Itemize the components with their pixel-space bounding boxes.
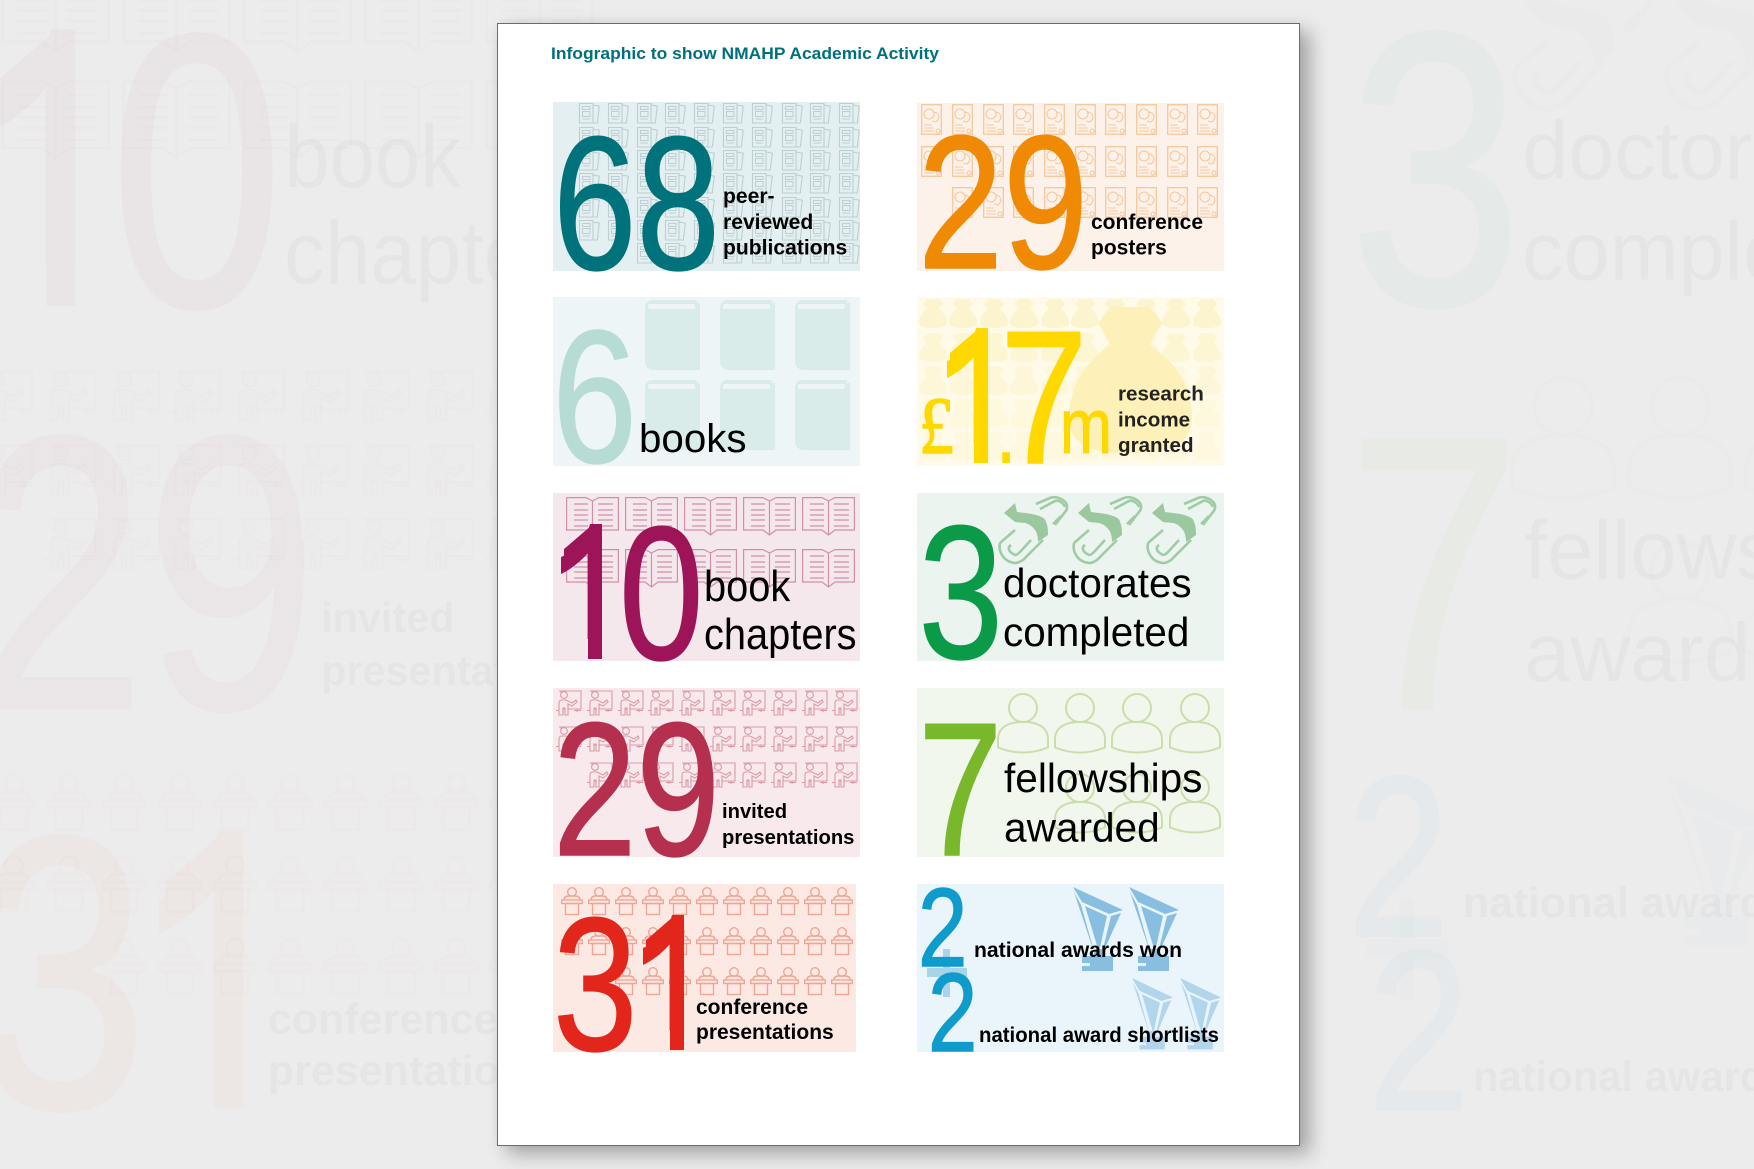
background: enlarged faded infographic: 7	[1348, 355, 1521, 791]
label: doctorates completed: doctorates	[1003, 560, 1192, 606]
number: £1.7m: 7	[1000, 291, 1088, 503]
panel: conference posters	[917, 96, 1224, 309]
label: books: books	[639, 416, 747, 461]
label: peer-reviewed publications: peer-	[723, 185, 775, 208]
background: enlarged faded infographic: presentations	[268, 1047, 550, 1095]
icons: posters grid	[922, 105, 1217, 217]
panel: conference presentations	[553, 884, 856, 1053]
panel: invited presentations	[553, 684, 860, 896]
panel: peer-reviewed publications	[553, 98, 860, 310]
label: research income granted: income	[1118, 408, 1190, 432]
icons: books	[645, 300, 850, 450]
number: 31	[558, 915, 684, 1053]
label: research income granted: granted	[1118, 434, 1194, 457]
panel: national awards	[917, 867, 1224, 1075]
icons: publications grid	[580, 104, 859, 263]
number: 10	[561, 524, 698, 662]
label: conference presentations: conference	[696, 996, 808, 1019]
background: enlarged faded infographic: 2	[1348, 729, 1449, 984]
label: research income granted: research	[1118, 382, 1204, 406]
background: enlarged faded infographic: invited	[321, 595, 455, 641]
label: doctorates completed: completed	[1003, 609, 1189, 655]
number: 2 won: 2	[918, 867, 967, 990]
number: £1.7m	[922, 328, 1108, 464]
panel: fellowships awarded	[917, 684, 1224, 896]
number: 3: 3	[918, 487, 1003, 699]
label: fellowships awarded: awarded	[1004, 804, 1160, 850]
icons: diploma scrolls	[1000, 497, 1215, 563]
background: enlarged faded infographic: presentations	[321, 648, 593, 694]
number: 10: 0	[619, 488, 704, 700]
number: 10: 1	[550, 488, 635, 700]
background: enlarged faded infographic: 2	[1368, 903, 1470, 1158]
number: 2 shortlists: 2	[928, 952, 977, 1075]
label: conference posters: conference	[1091, 211, 1203, 234]
title: Infographic to show NMAHP Academic Activity	[551, 44, 940, 63]
panel: doctorates completed	[917, 487, 1224, 699]
label: book chapters: book	[704, 561, 790, 610]
icons: open books	[567, 498, 854, 587]
background: enlarged faded infographic: chapters	[284, 204, 597, 303]
number: 29: 29	[918, 96, 1088, 309]
number: £1.7m: m	[1060, 382, 1112, 470]
background: enlarged faded infographic: conference	[268, 996, 497, 1044]
label: peer-reviewed publications: reviewed	[723, 211, 813, 234]
number: £1.7m: .	[995, 374, 1017, 485]
icons: lecterns	[562, 888, 852, 994]
label: conference posters: posters	[1091, 236, 1167, 260]
white report page	[497, 23, 1300, 1146]
label: fellowships awarded: fellowships	[1004, 755, 1202, 801]
number: 7: 7	[918, 684, 1003, 896]
icons: trophies	[927, 887, 1221, 1049]
label: peer-reviewed publications: publications	[723, 236, 847, 260]
panel: book chapters	[553, 493, 860, 662]
icons: money bags	[919, 299, 1221, 461]
icons: people	[998, 694, 1220, 833]
label: invited presentations: presentations	[722, 827, 854, 849]
label: book chapters: chapters	[704, 609, 857, 658]
number: 68: 68	[553, 98, 720, 310]
icon: large money bag	[1069, 307, 1192, 453]
label: national awards won: national awards won	[974, 939, 1182, 962]
label: book chapters	[704, 561, 857, 658]
label: national award shortlists: national award shortlists	[979, 1024, 1219, 1047]
panel: research income granted	[917, 297, 1224, 466]
number: £1.7m: £	[919, 381, 954, 471]
number: 31: 1	[632, 879, 717, 1091]
label: invited presentations: invited	[722, 801, 787, 823]
number: 31: 3	[553, 879, 638, 1091]
number: £1.7m: 1	[936, 292, 1021, 504]
number: 29: 29	[553, 684, 720, 896]
icons: presenters	[556, 691, 857, 787]
panel: books	[552, 292, 860, 503]
label: conference presentations: presentations	[696, 1021, 834, 1044]
number: 6: 6	[552, 292, 637, 503]
background: enlarged faded infographic: book	[284, 108, 461, 207]
